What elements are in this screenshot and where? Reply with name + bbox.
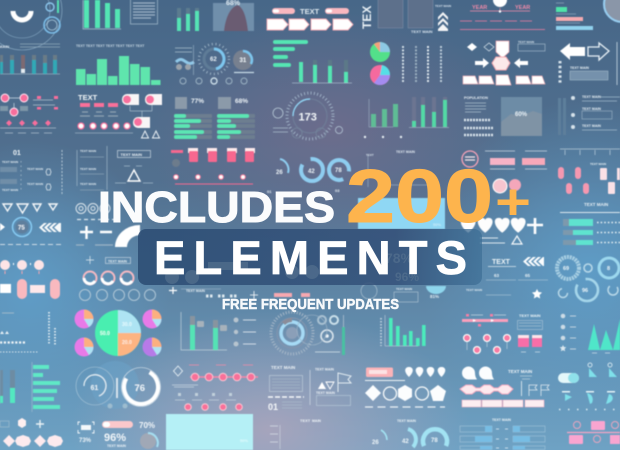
blobs and pill row <box>460 366 549 407</box>
dial top right <box>604 0 620 22</box>
pink timeline centre <box>172 365 258 410</box>
blue rings right: 96 <box>582 288 588 294</box>
title 200 plus: + <box>495 174 531 230</box>
strip under title: TEXT MAIN <box>396 287 412 291</box>
list column second: TEXT MAIN <box>80 149 96 153</box>
photo with percent <box>213 0 254 31</box>
faint content in banner: 78% <box>385 250 414 266</box>
ring gauges middle: 01 <box>267 189 272 194</box>
gauge 173 <box>273 93 342 139</box>
list column left row 4: TEXT MAIN <box>2 160 18 164</box>
pink capsules right <box>558 149 620 194</box>
pink ring callout <box>462 151 547 193</box>
double gauges 61 and 76: 61 <box>90 385 98 392</box>
title 200 plus <box>346 154 531 238</box>
circular gauges row 2 <box>175 44 254 84</box>
year timeline <box>460 0 545 30</box>
list column second <box>77 146 107 190</box>
percent cards <box>174 97 255 139</box>
pie charts <box>370 42 390 85</box>
small stats left under title <box>0 312 55 352</box>
title includes: INCLUDES <box>98 183 335 232</box>
text main flag block: TEXT MAIN <box>316 391 335 395</box>
blue rings right <box>557 257 619 301</box>
cyan panel: 50% <box>433 222 441 227</box>
green column chart <box>76 44 160 85</box>
list column left row 4 <box>0 150 62 194</box>
population block <box>464 96 494 135</box>
faint content in banner: 96% <box>395 270 419 284</box>
pie cluster: 50.0 <box>100 331 110 337</box>
range rows <box>460 418 545 450</box>
title 200 plus: 200 <box>346 154 493 238</box>
flow chart: TEXT MAIN <box>518 40 534 44</box>
text main flag block <box>310 368 351 406</box>
text document box <box>130 0 158 24</box>
list column left row 4: 01 <box>13 150 21 157</box>
percent cards: 77% <box>191 98 204 105</box>
triangles row left <box>3 204 57 213</box>
text main cups: TEXT MAIN <box>519 313 541 318</box>
vertical text and boxes: TEX <box>360 6 374 29</box>
target circles and symbols <box>76 204 140 247</box>
hearts and plus <box>461 203 543 244</box>
text tags and rings: TEXT <box>78 93 98 102</box>
range rows: TEXT MAIN <box>492 418 511 422</box>
cyan panel bottom: 50% <box>240 438 248 443</box>
bottom ring gauges: 26 <box>372 440 379 446</box>
bracket and percent stats: 73% <box>79 438 92 444</box>
ring gauges middle: 42 <box>308 169 315 175</box>
green column chart: TEXT TEXT TEXT TEXT TEXT TEXT TEXT <box>76 44 145 48</box>
bracket and percent stats: TEXT MAIN <box>107 444 126 448</box>
bottom ring gauges: 78 <box>431 438 438 444</box>
gauge top left <box>0 0 62 50</box>
ring 75 and chevrons <box>0 218 63 244</box>
bracket and percent stats: 70% <box>139 421 155 430</box>
ring gauges middle: 26 <box>276 170 283 176</box>
text main list right: TEXT MAIN <box>582 124 601 128</box>
faint content in banner <box>165 250 419 284</box>
population photo <box>501 97 542 136</box>
gauge 173: 173 <box>298 112 317 124</box>
pie cluster: 20.0 <box>122 340 132 346</box>
vertical text and boxes: TEXT MAIN <box>435 4 451 8</box>
cyan panel <box>358 198 445 229</box>
two bar chart with legend <box>181 312 256 350</box>
mini bars <box>177 8 199 31</box>
title elements: ELEMENTS <box>154 231 467 284</box>
dark banner behind elements <box>138 229 482 285</box>
text chevrons block: 63 <box>494 273 500 278</box>
pink timeline bottom right <box>567 421 620 444</box>
circular gauges row 2: 62 <box>210 57 217 63</box>
text tags and rings <box>75 93 162 138</box>
blobs and pill row: TEXT MAIN <box>508 369 532 374</box>
horizontal green bars <box>273 40 310 83</box>
pink node diagram <box>0 94 58 133</box>
list column second: TEXT MAIN <box>80 167 96 171</box>
subtitle free frequent updates: FREE FREQUENT UPDATES <box>222 297 399 313</box>
flow chart <box>463 40 545 85</box>
double gauges 61 and 76 <box>76 361 164 410</box>
text main box 01 <box>268 365 304 412</box>
big arrows: TEXT MAIN <box>570 66 589 70</box>
pills and arrows top <box>267 7 353 30</box>
pink cups row <box>171 148 255 184</box>
text main rings row: TEXT MAIN <box>108 260 127 264</box>
text chevrons block: TEXT <box>492 259 511 266</box>
column frame behind title <box>366 150 440 187</box>
big arrows <box>560 42 617 85</box>
double gauges 61 and 76: 76 <box>134 383 145 394</box>
bracket and percent stats <box>78 421 158 449</box>
column frame behind title: TEXT <box>366 153 374 157</box>
strip under title <box>169 283 482 302</box>
vertical text and boxes: TEXT MAIN <box>411 29 433 34</box>
list column left row 4: TEXT MAIN <box>2 188 18 192</box>
text main bars right: TEXT MAIN <box>584 202 608 207</box>
white shapes row <box>365 367 446 407</box>
population photo: 60% <box>515 112 528 118</box>
list column left row 4: TEXT MAIN <box>27 182 43 186</box>
labelled bar chart left <box>0 44 60 74</box>
text main list right <box>558 95 620 135</box>
shapes bottom left <box>0 418 63 447</box>
text main list right: TEXT MAIN <box>582 107 601 111</box>
text main bars right <box>560 202 620 245</box>
ring 75 and chevrons: 75 <box>18 226 25 232</box>
bottom ring gauges <box>312 419 447 447</box>
percent cards: 68% <box>235 98 248 105</box>
population block: POPULATION <box>464 96 488 100</box>
photo with percent: 68% <box>226 0 241 7</box>
ring gauges middle: 78 <box>335 168 342 174</box>
text main box 01: TEXT MAIN <box>271 365 295 370</box>
list column second: TEXT MAIN <box>80 182 96 186</box>
pie cluster <box>74 310 162 356</box>
strip under title: TEXT MAIN <box>186 289 205 293</box>
bar chart top <box>83 0 121 29</box>
pink white circles and capsules <box>0 260 60 299</box>
pie cluster: 30.0 <box>122 322 132 328</box>
strip under title: 81% <box>430 294 439 299</box>
column chart 6 bars <box>381 315 426 346</box>
text main triangle: TEXT MAIN <box>120 152 142 157</box>
strip under title: TEXT MAIN <box>466 288 482 292</box>
blue rings right: 69 <box>563 266 569 272</box>
dot columns <box>403 47 441 83</box>
bars top right <box>556 3 593 30</box>
text chevrons block: 65 <box>525 273 531 278</box>
pink flow timeline <box>462 314 510 354</box>
circular gauges row 2: 31 <box>240 58 247 64</box>
pink capsules right: TEXT MAIN <box>590 162 606 166</box>
bottom ring gauges: 42 <box>402 439 409 445</box>
text main rings row <box>80 256 156 300</box>
year timeline: YEAR <box>472 5 487 11</box>
column frame behind title: TEXT MAIN <box>396 150 415 154</box>
ring gauges middle <box>267 156 353 194</box>
small rings and vertical bar <box>297 315 345 355</box>
text main box 01: 01 <box>268 402 278 412</box>
ring gauges middle: 03 <box>335 188 340 193</box>
text main list right: TEXT MAIN <box>582 95 601 99</box>
bottom ring gauges: TEXT MAIN <box>397 419 416 423</box>
vertical text and boxes <box>360 0 451 34</box>
axis chart bottom: TEXT <box>300 418 311 423</box>
teal quarter shapes right <box>558 363 619 410</box>
pills and arrows top: TEXT <box>300 7 320 16</box>
cyan panel bottom <box>166 414 253 450</box>
axis chart bottom <box>270 418 311 449</box>
icons and teal triangles <box>560 314 620 353</box>
year timeline: YEAR <box>515 5 530 11</box>
text main triangle <box>115 150 153 183</box>
bracket and percent stats: 96% <box>104 432 126 444</box>
dial <box>271 312 313 354</box>
bottom ring gauges: MAIN <box>312 419 321 423</box>
text chevrons block <box>486 257 548 298</box>
text main flag block: TEXT MAIN <box>315 368 334 372</box>
thin green bars <box>310 60 352 83</box>
text main cups <box>518 313 542 352</box>
blue rings right: 8 <box>607 266 610 272</box>
list column left row 4: TEXT MAIN <box>27 167 43 171</box>
column charts centre <box>364 97 449 138</box>
green horizontal bars bottom <box>0 362 60 412</box>
